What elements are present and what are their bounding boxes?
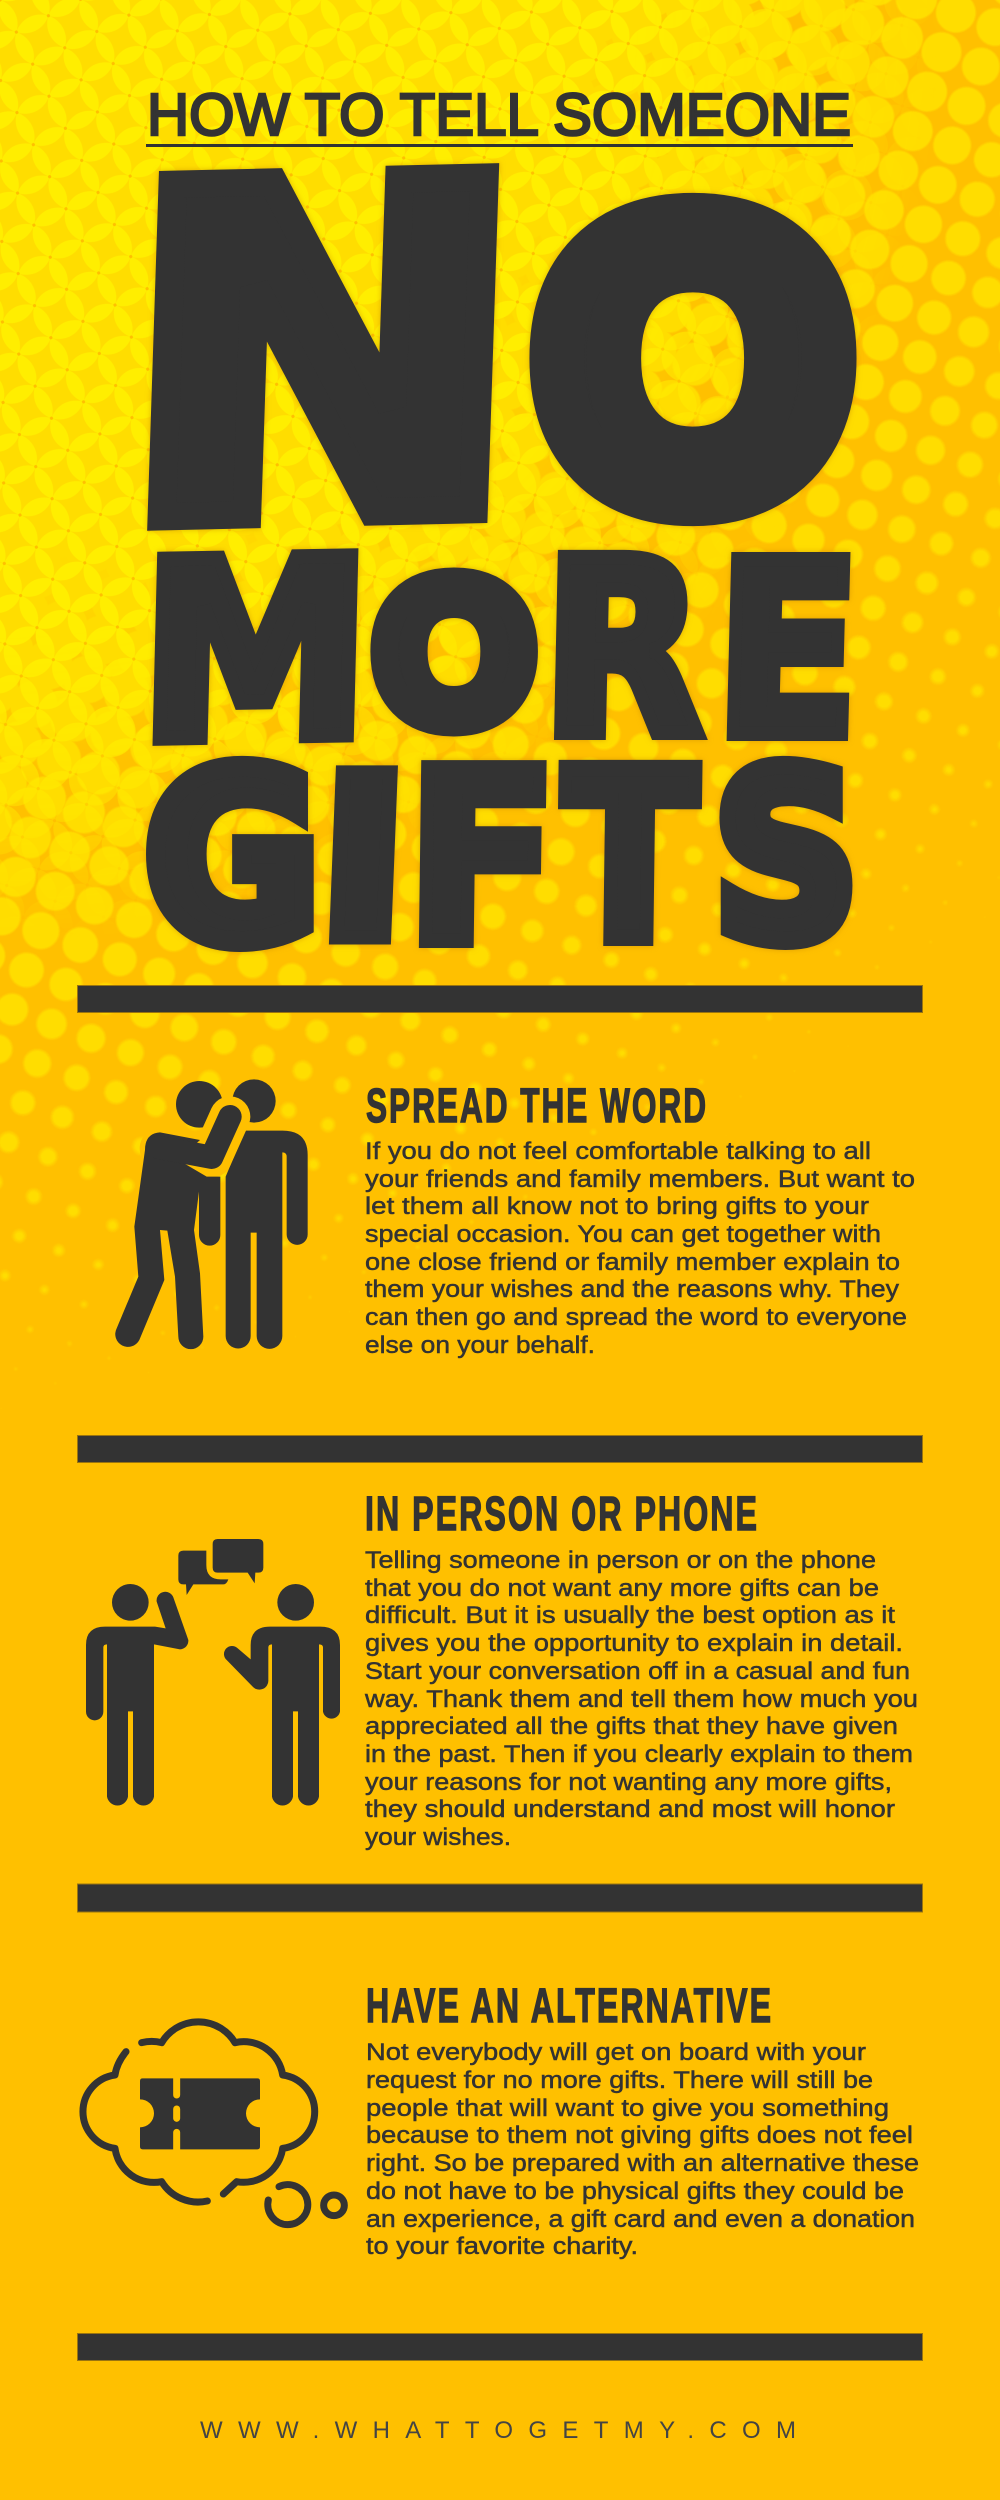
- title: giant NO MORE GIFTS lettering: S: [713, 723, 859, 993]
- body text: in person or phone: they should understand and most will honor: [365, 1796, 895, 1823]
- title: giant NO MORE GIFTS lettering: O: [376, 541, 532, 763]
- title: giant NO MORE GIFTS lettering: E: [712, 513, 863, 791]
- panel: spread the word: [115, 1079, 915, 1359]
- body text: in person or phone: Telling someone in person or on the phone: [365, 1547, 876, 1574]
- panel: have an alternative: [83, 1980, 919, 2260]
- divider bar 3: [78, 1884, 922, 1912]
- body text: in person or phone: Start your conversation off in a casual and fun: [365, 1658, 910, 1685]
- body text: have an alternative: right. So be prepared with an alternative these: [366, 2150, 919, 2177]
- heading: have an alternative: HAVE AN ALTERNATIVE: [366, 1980, 773, 2033]
- body text: have an alternative: people that will want to give you something: [366, 2095, 889, 2122]
- body text: spread the word: If you do not feel comfortable talking to all: [365, 1138, 871, 1165]
- title block: [115, 82, 863, 998]
- background: yellow halftone and petal pattern: [0, 0, 1000, 1370]
- body text: in person or phone: your reasons for not wanting any more gifts,: [365, 1769, 892, 1796]
- body text: in person or phone: way. Thank them and tell them how much you: [364, 1686, 918, 1713]
- body text: spread the word: can then go and spread the word to everyone: [365, 1304, 907, 1331]
- body text: in person or phone: [364, 1547, 918, 1851]
- body text: have an alternative: request for no more gifts. There will still be: [366, 2067, 873, 2094]
- body text: spread the word: let them all know not to bring gifts to your: [365, 1193, 869, 1220]
- body text: in person or phone: that you do not want any more gifts can be: [365, 1575, 879, 1602]
- body text: spread the word: your friends and family members. But want to: [365, 1166, 915, 1193]
- heading: in person or phone: IN PERSON OR PHONE: [365, 1488, 759, 1541]
- body text: spread the word: special occasion. You can get together with: [365, 1221, 881, 1248]
- panel: in person or phone: [86, 1488, 918, 1851]
- title: giant NO MORE GIFTS lettering: R: [540, 511, 707, 790]
- icon: two people whispering: [115, 1079, 308, 1349]
- body text: have an alternative: Not everybody will get on board with your: [366, 2039, 866, 2066]
- title: giant NO MORE GIFTS lettering: M: [137, 507, 374, 797]
- body text: in person or phone: gives you the opportunity to explain in detail.: [365, 1630, 903, 1657]
- body text: in person or phone: in the past. Then if you clearly explain to them: [365, 1741, 913, 1768]
- icon: thought bubble with ticket: [83, 2022, 344, 2225]
- divider bar 2: [78, 1436, 922, 1462]
- title: giant NO MORE GIFTS lettering: [115, 87, 863, 998]
- title: giant NO MORE GIFTS lettering: O: [541, 140, 846, 579]
- body text: spread the word: else on your behalf.: [365, 1332, 595, 1359]
- divider bar 4: [78, 2334, 922, 2360]
- body text: have an alternative: to your favorite charity.: [366, 2233, 638, 2260]
- title: giant NO MORE GIFTS lettering: G: [145, 724, 320, 993]
- body text: have an alternative: because to them not giving gifts does not feel: [366, 2122, 913, 2149]
- icon: two people talking with speech bubbles: [86, 1539, 340, 1805]
- body text: in person or phone: your wishes.: [365, 1824, 511, 1851]
- body text: have an alternative: do not have to be physical gifts they could be: [366, 2178, 904, 2205]
- heading: spread the word: SPREAD THE WORD: [366, 1080, 708, 1133]
- body text: in person or phone: difficult. But it is usually the best option as it: [365, 1602, 895, 1629]
- body text: have an alternative: [366, 2039, 919, 2260]
- title: giant NO MORE GIFTS lettering: F: [405, 721, 559, 998]
- title underline: [146, 144, 853, 147]
- body text: in person or phone: appreciated all the gifts that they have given: [365, 1713, 898, 1740]
- title: giant NO MORE GIFTS lettering: N: [115, 87, 531, 626]
- body text: spread the word: [365, 1138, 915, 1359]
- body text: have an alternative: an experience, a gift card and even a donation: [366, 2206, 915, 2233]
- footer url: WWW.WHATTOGETMY.COM: [200, 2417, 796, 2444]
- divider bar 1: [78, 986, 922, 1012]
- title: giant NO MORE GIFTS lettering: T: [561, 722, 697, 993]
- title: giant NO MORE GIFTS lettering: I: [312, 728, 415, 992]
- body text: spread the word: one close friend or family member explain to: [365, 1249, 900, 1276]
- body text: spread the word: them your wishes and the reasons why. They: [365, 1276, 900, 1303]
- title: how to tell someone: HOW TO TELL SOMEONE: [147, 82, 851, 148]
